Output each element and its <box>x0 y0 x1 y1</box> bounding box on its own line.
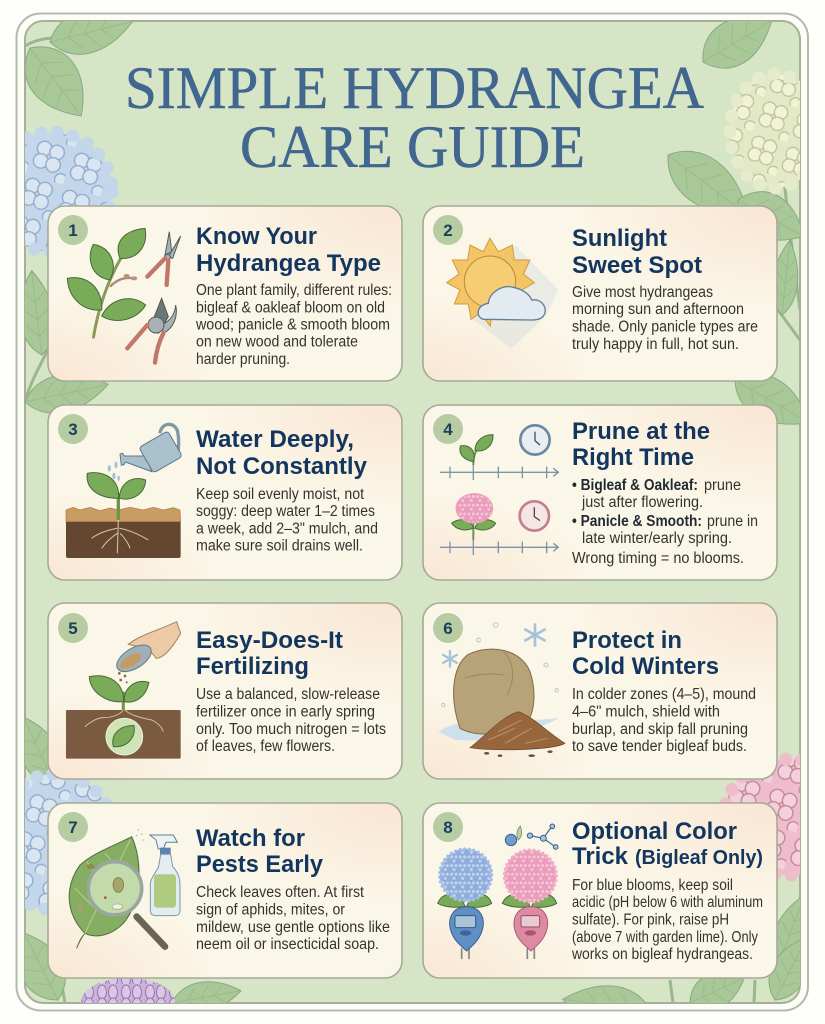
body text 8: sulfate). For pink, raise pH <box>572 912 729 928</box>
heading 8: (Bigleaf Only) <box>635 847 763 869</box>
body text 2: shade. Only panicle types are <box>572 318 758 336</box>
body text 4: prune in <box>707 513 758 530</box>
title <box>125 55 704 180</box>
heading 4: Right Time <box>572 444 694 471</box>
body text 4 <box>572 477 758 567</box>
heading 3: Not Constantly <box>196 453 368 480</box>
heading 7 <box>196 825 324 878</box>
heading 1: Hydrangea Type <box>196 250 381 277</box>
body text 7: Check leaves often. At first <box>196 884 365 901</box>
body text 1: on new wood and tolerate <box>196 334 358 350</box>
panel: 4 prune at the right time <box>423 405 777 580</box>
body text 6: to save tender bigleaf buds. <box>572 738 747 755</box>
panel: 6 protect in cold winters <box>423 603 777 779</box>
heading 2: Sweet Spot <box>572 252 702 279</box>
body text 5: only. Too much nitrogen = lots <box>196 721 386 738</box>
panel: 5 easy-does-it fertilizing <box>48 603 402 779</box>
number badge 6: 6 <box>443 619 453 638</box>
heading 3: Water Deeply, <box>196 426 354 453</box>
body text 8: works on bigleaf hydrangeas. <box>571 946 753 963</box>
icon: hydrangea branch and pruners <box>67 228 181 363</box>
body text 2 <box>572 284 758 353</box>
heading 4 <box>572 418 710 471</box>
body text 3: Keep soil evenly moist, not <box>196 486 365 503</box>
number badge 4: 4 <box>443 420 453 439</box>
body text 3: soggy: deep water 1–2 times <box>196 503 375 520</box>
body text 1: wood; panicle & smooth bloom <box>195 316 390 334</box>
body text 8 <box>571 877 763 963</box>
body text 5: fertilizer once in early spring <box>196 704 375 720</box>
number badge 1: 1 <box>68 221 78 240</box>
body text 6: burlap, and skip fall pruning <box>572 721 748 738</box>
number badge 5: 5 <box>68 619 78 638</box>
body text 8: For blue blooms, keep soil <box>572 877 733 894</box>
heading 4: Prune at the <box>572 418 710 445</box>
panel: 2 sunlight sweet spot <box>423 206 777 381</box>
heading 1 <box>196 223 381 277</box>
number badge 2 <box>433 215 463 245</box>
heading 3 <box>196 426 368 480</box>
body text 4: • Bigleaf & Oakleaf: <box>572 477 698 494</box>
body text 6: 4–6" mulch, shield with <box>572 704 720 720</box>
icon: hand adding fertilizer to plant <box>66 622 181 759</box>
body text 5: of leaves, few flowers. <box>196 738 335 755</box>
body text 7: sign of aphids, mites, or <box>196 902 345 918</box>
body text 7: neem oil or insecticidal soap. <box>196 936 379 953</box>
body text 4: • Panicle & Smooth: <box>572 513 702 530</box>
body text 2: truly happy in full, hot sun. <box>572 336 739 353</box>
title: CARE GUIDE <box>240 114 585 180</box>
body text 6 <box>572 686 756 755</box>
heading 7: Pests Early <box>196 851 324 878</box>
heading 6: Cold Winters <box>572 653 719 680</box>
title: SIMPLE HYDRANGEA <box>125 55 704 121</box>
panel: 1 know your hydrangea type <box>48 206 402 381</box>
number badge 8 <box>433 812 463 842</box>
panel: 3 water deeply <box>48 405 402 580</box>
heading 6: Protect in <box>572 627 682 654</box>
number badge 7: 7 <box>68 818 78 837</box>
heading 7: Watch for <box>196 825 305 852</box>
number badge 7 <box>58 812 88 842</box>
body text 4: Wrong timing = no blooms. <box>572 550 744 567</box>
number badge 3: 3 <box>68 420 78 439</box>
heading 8 <box>572 818 763 870</box>
body text 5: Use a balanced, slow-release <box>196 686 380 703</box>
number badge 4 <box>433 414 463 444</box>
heading 1: Know Your <box>196 223 317 250</box>
icon: blue and pink hydrangeas with pH meters <box>438 824 558 959</box>
body text 2: Give most hydrangeas <box>572 284 713 301</box>
heading 2: Sunlight <box>572 225 667 252</box>
panel: 7 watch for pests early <box>48 803 402 978</box>
body text 1 <box>195 282 392 368</box>
body text 4: late winter/early spring. <box>582 530 732 547</box>
body text 3: a week, add 2–3" mulch, and <box>196 520 378 538</box>
icon: sun and cloud <box>447 238 558 348</box>
number badge 6 <box>433 613 463 643</box>
body text 7 <box>196 884 390 953</box>
icon: leaf, magnifier and spray bottle <box>69 829 180 948</box>
heading 8: Trick <box>572 843 629 870</box>
panel: 8 optional color trick <box>423 803 777 978</box>
body text 3: make sure soil drains well. <box>196 538 363 554</box>
heading 6 <box>572 627 719 680</box>
icon: pruning timelines with clocks <box>440 425 558 555</box>
body text 2: morning sun and afternoon <box>572 301 744 318</box>
number badge 8: 8 <box>443 818 453 837</box>
heading 8: Optional Color <box>572 818 737 845</box>
icon: watering can and plant in soil <box>66 424 182 558</box>
heading 5 <box>196 627 343 680</box>
body text 7: mildew, use gentle options like <box>196 919 390 936</box>
heading 5: Fertilizing <box>196 653 309 680</box>
body text 8: (above 7 with garden lime). Only <box>572 929 758 946</box>
body text 1: One plant family, different rules: <box>196 282 392 299</box>
body text 5 <box>196 686 386 755</box>
heading 2 <box>572 225 702 279</box>
body text 3 <box>196 486 378 554</box>
number badge 3 <box>58 414 88 444</box>
heading 5: Easy-Does-It <box>196 627 343 654</box>
body text 8: acidic (pH below 6 with aluminum <box>572 894 763 911</box>
icon: burlap and mulch with snow <box>438 623 565 757</box>
body text 1: bigleaf & oakleaf bloom on old <box>196 300 385 316</box>
number badge 1 <box>58 215 88 245</box>
number badge 2: 2 <box>443 221 453 240</box>
body text 6: In colder zones (4–5), mound <box>572 686 756 703</box>
body text 4: prune <box>704 477 741 494</box>
number badge 5 <box>58 613 88 643</box>
body text 4: just after flowering. <box>581 494 703 511</box>
body text 1: harder pruning. <box>196 351 290 368</box>
